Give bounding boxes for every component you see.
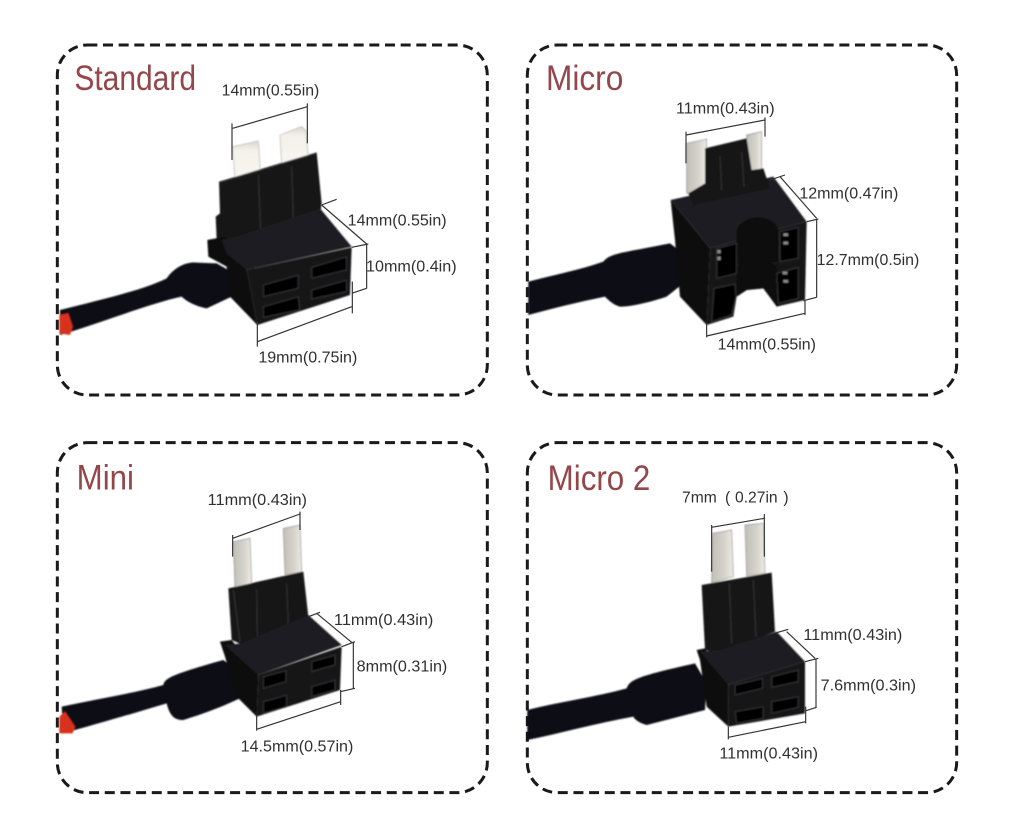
label: blade width: (	[725, 490, 731, 507]
icon: micro 2 fuse tap	[527, 523, 805, 740]
heading: Micro 2: Micro 2	[548, 459, 650, 498]
dimension lines	[232, 103, 368, 347]
panel: Micro	[527, 45, 957, 395]
label: depth: 12mm(0.47in)	[799, 185, 898, 202]
dimension lines	[233, 512, 355, 731]
panel: Micro 2	[527, 443, 957, 793]
dimension lines	[686, 117, 818, 337]
label: blade width: )	[783, 490, 789, 507]
label: width: 14.5mm(0.57in)	[241, 739, 353, 756]
label: depth: 11mm(0.43in)	[334, 612, 433, 629]
label: width: 14mm(0.55in)	[718, 336, 816, 353]
label: blade width: 11mm(0.43in)	[676, 100, 775, 117]
dimension lines	[712, 514, 818, 739]
label: depth: 11mm(0.43in)	[803, 627, 902, 644]
heading: Standard: Standard	[74, 59, 196, 98]
panel: Standard	[57, 45, 487, 395]
label: depth: 14mm(0.55in)	[348, 212, 447, 229]
label: height: 10mm(0.4in)	[366, 259, 457, 276]
label: width: 11mm(0.43in)	[719, 745, 818, 762]
label: width: 19mm(0.75in)	[258, 349, 357, 366]
label: blade width: 11mm(0.43in)	[208, 492, 307, 509]
label: blade width: 7mm	[682, 490, 717, 507]
icon: standard fuse tap	[59, 127, 352, 335]
label: height: 12.7mm(0.5in)	[817, 252, 919, 269]
label: height: 8mm(0.31in)	[357, 659, 447, 676]
label: blade width: 0.27in	[735, 490, 778, 507]
icon: mini fuse tap	[59, 525, 342, 733]
heading: Micro: Micro	[546, 59, 623, 98]
panel: Mini	[57, 443, 487, 793]
heading: Mini: Mini	[77, 458, 134, 497]
icon: micro fuse tap	[528, 132, 807, 325]
label: blade width: 14mm(0.55in)	[222, 83, 319, 100]
label: height: 7.6mm(0.3in)	[821, 678, 916, 695]
